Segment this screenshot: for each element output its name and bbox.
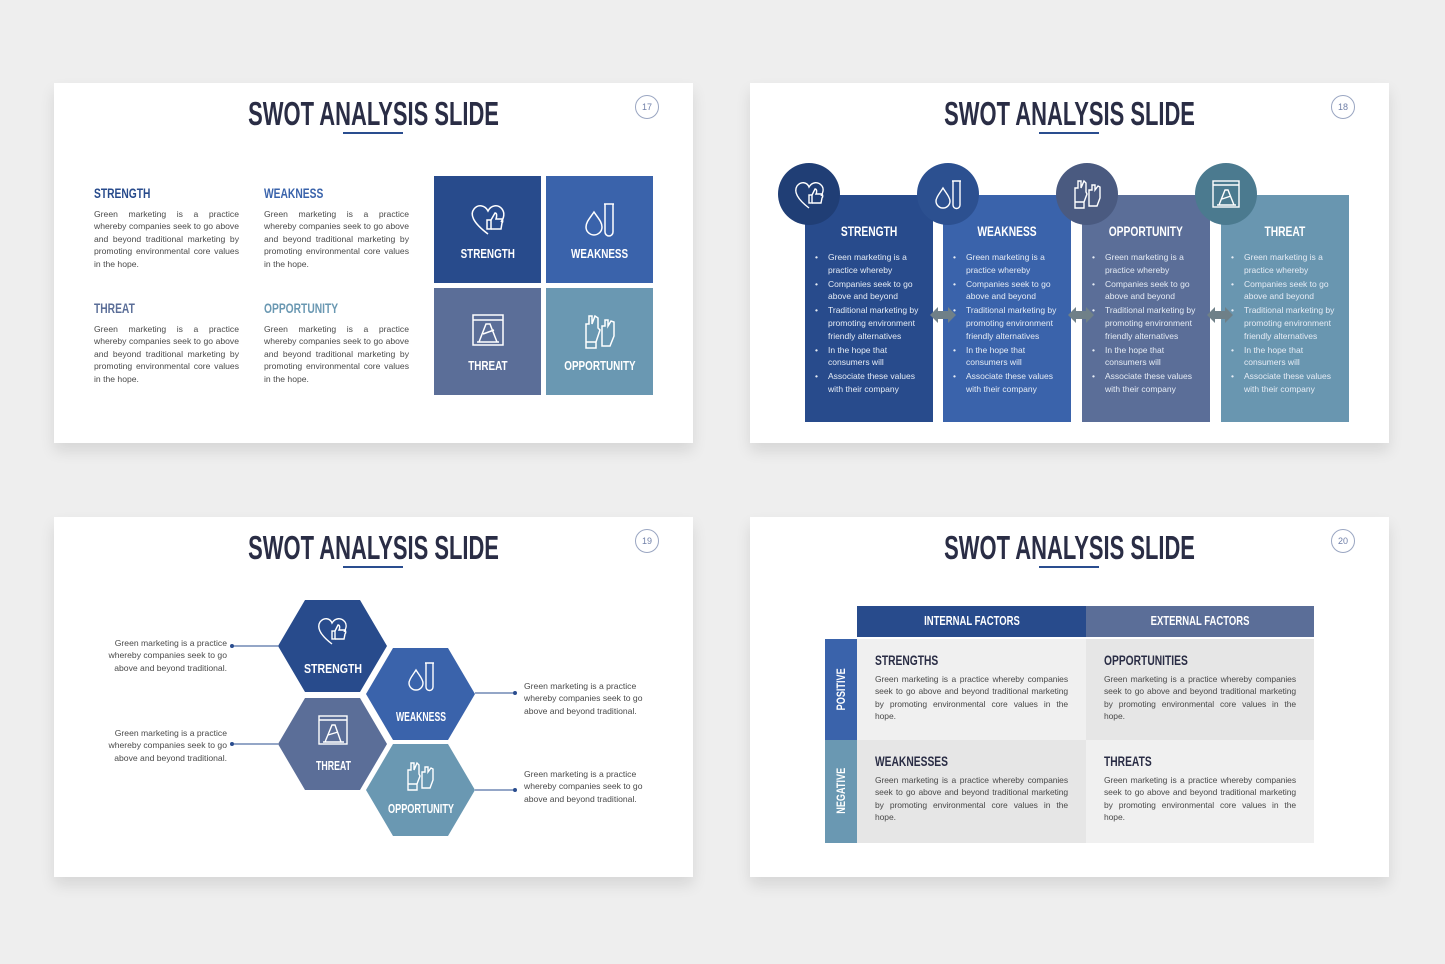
column: threat: Associate these values with their company: [1244, 371, 1331, 394]
text block: threat: THREAT: [94, 301, 135, 316]
column: strength: Green marketing is a practice whereby: [828, 252, 907, 275]
icon circles: [778, 163, 1257, 323]
title: SWOT ANALYSIS SLIDE: [944, 529, 1195, 566]
grid tile: weakness: WEAKNESS: [571, 246, 628, 261]
slide 3: hexagons: [54, 517, 693, 877]
cell: threats: [1086, 740, 1314, 843]
cell: weaknesses: Green marketing is a practice whereby companies seek to go above and beyond traditional marketing by promoting environmental core values in the hope.: [875, 775, 1068, 822]
text: right top: Green marketing is a practice whereby companies seek to go above and beyond traditional.: [524, 681, 642, 716]
cell: strengths: Green marketing is a practice whereby companies seek to go above and beyond traditional marketing by promoting environmental core values in the hope.: [875, 674, 1068, 721]
grid tile: weakness: [546, 176, 653, 283]
column: opportunity: Traditional marketing by promoting environment friendly alternatives: [1105, 305, 1195, 341]
arrows between columns: [930, 307, 1233, 323]
page number: 20: [1338, 536, 1348, 546]
header: external factors: EXTERNAL FACTORS: [1151, 614, 1249, 628]
cell: strengths: [857, 639, 1086, 740]
icon: hands circle: [1056, 163, 1118, 225]
hexagon: threat: THREAT: [316, 758, 351, 773]
hexagon: opportunity: [366, 744, 475, 836]
column: threat: In the hope that consumers will: [1244, 345, 1303, 367]
grid tile: opportunity: [546, 288, 653, 395]
grid tile: strength: STRENGTH: [460, 246, 515, 261]
column: strength: Traditional marketing by promoting environment friendly alternatives: [828, 305, 918, 341]
column: threat: THREAT: [1265, 224, 1305, 239]
column: weakness: Green marketing is a practice whereby: [966, 252, 1045, 275]
column: weakness: [943, 195, 1071, 422]
cell: strengths: STRENGTHS: [875, 653, 938, 668]
hexagon: weakness: WEAKNESS: [396, 709, 446, 724]
page number: [1331, 529, 1355, 553]
grid tile: opportunity: OPPORTUNITY: [564, 358, 635, 373]
hexagon: opportunity: OPPORTUNITY: [388, 801, 454, 816]
header: internal factors: INTERNAL FACTORS: [924, 614, 1019, 628]
column: strength: STRENGTH: [841, 224, 897, 239]
column: threat: Traditional marketing by promoting environment friendly alternatives: [1244, 305, 1334, 341]
column: threat: Companies seek to go above and beyond: [1244, 279, 1329, 301]
icon: drop/tube circle: [917, 163, 979, 225]
slide 1: SWOT text + grid: [54, 83, 693, 443]
text block: strength: Green marketing is a practice whereby companies seek to go above and beyond traditional marketing by promoting environmental core values in the hope.: [94, 209, 239, 269]
page number: [635, 529, 659, 553]
column: threat: Green marketing is a practice whereby: [1244, 252, 1323, 275]
title: SWOT ANALYSIS SLIDE: [248, 95, 499, 132]
page number: [635, 95, 659, 119]
column: strength: Companies seek to go above and beyond: [828, 279, 913, 301]
column: weakness: Traditional marketing by promoting environment friendly alternatives: [966, 305, 1056, 341]
column: opportunity: [1082, 195, 1210, 422]
text block: weakness: WEAKNESS: [264, 186, 323, 201]
header: external factors: [1086, 606, 1314, 637]
title: SWOT ANALYSIS SLIDE: [248, 529, 499, 566]
cell: weaknesses: [857, 740, 1086, 843]
page number: 18: [1338, 102, 1348, 112]
cell: threats: Green marketing is a practice whereby companies seek to go above and beyond traditional marketing by promoting environmental core values in the hope.: [1104, 775, 1296, 822]
icon: heart circle: [778, 163, 840, 225]
text block: weakness: Green marketing is a practice whereby companies seek to go above and beyond traditional marketing by promoting environmental core values in the hope.: [264, 209, 409, 269]
side label: positive: POSITIVE: [834, 668, 848, 710]
column: opportunity: Companies seek to go above and beyond: [1105, 279, 1190, 301]
text: left top: Green marketing is a practice whereby companies seek to go above and beyond traditional.: [109, 638, 227, 673]
grid tile: strength: [434, 176, 541, 283]
side label: negative: NEGATIVE: [834, 768, 848, 814]
text block: threat: Green marketing is a practice whereby companies seek to go above and beyond traditional marketing by promoting environmental core values in the hope.: [94, 324, 239, 384]
column: opportunity: In the hope that consumers will: [1105, 345, 1164, 367]
page number: 19: [642, 536, 652, 546]
column: weakness: Companies seek to go above and beyond: [966, 279, 1051, 301]
hexagon: strength: STRENGTH: [304, 661, 362, 676]
grid tile: threat: THREAT: [468, 358, 507, 373]
column: weakness: Associate these values with their company: [966, 371, 1053, 394]
title: SWOT ANALYSIS SLIDE: [944, 95, 1195, 132]
side label: positive: [825, 639, 857, 740]
page number: [1331, 95, 1355, 119]
text block: strength: STRENGTH: [94, 186, 150, 201]
text block: opportunity: Green marketing is a practice whereby companies seek to go above and beyond traditional marketing by promoting environmental core values in the hope.: [264, 324, 409, 384]
column: strength: Associate these values with their company: [828, 371, 915, 394]
header: internal factors: [857, 606, 1086, 637]
text: left bottom: Green marketing is a practice whereby companies seek to go above and beyond traditional.: [109, 728, 227, 763]
column: weakness: WEAKNESS: [977, 224, 1037, 239]
cell: weaknesses: WEAKNESSES: [875, 754, 948, 769]
column: strength: In the hope that consumers will: [828, 345, 887, 367]
cell: threats: THREATS: [1104, 754, 1152, 769]
column: weakness: In the hope that consumers will: [966, 345, 1025, 367]
cell: opportunities: [1086, 639, 1314, 740]
side label: negative: [825, 740, 857, 843]
hexagon: weakness: [366, 648, 475, 740]
page number: 17: [642, 102, 652, 112]
slide 4: SWOT matrix: [750, 517, 1389, 877]
column: opportunity: Green marketing is a practice whereby: [1105, 252, 1184, 275]
text block: opportunity: OPPORTUNITY: [264, 301, 338, 316]
column: strength: [805, 195, 933, 422]
hexagon diagram: [230, 600, 517, 836]
hexagon: strength: [278, 600, 387, 692]
slide 2: SWOT columns: [750, 83, 1389, 443]
icon: cone circle: [1195, 163, 1257, 225]
cell: opportunities: Green marketing is a practice whereby companies seek to go above and beyond traditional marketing by promoting environmental core values in the hope.: [1104, 674, 1296, 721]
column: opportunity: OPPORTUNITY: [1109, 224, 1183, 239]
hexagon: threat: [278, 698, 387, 790]
column: opportunity: Associate these values with their company: [1105, 371, 1192, 394]
grid tile: threat: [434, 288, 541, 395]
text: right bottom: Green marketing is a practice whereby companies seek to go above and beyond traditional.: [524, 769, 642, 804]
cell: opportunities: OPPORTUNITIES: [1104, 653, 1188, 668]
column: threat: [1221, 195, 1349, 422]
